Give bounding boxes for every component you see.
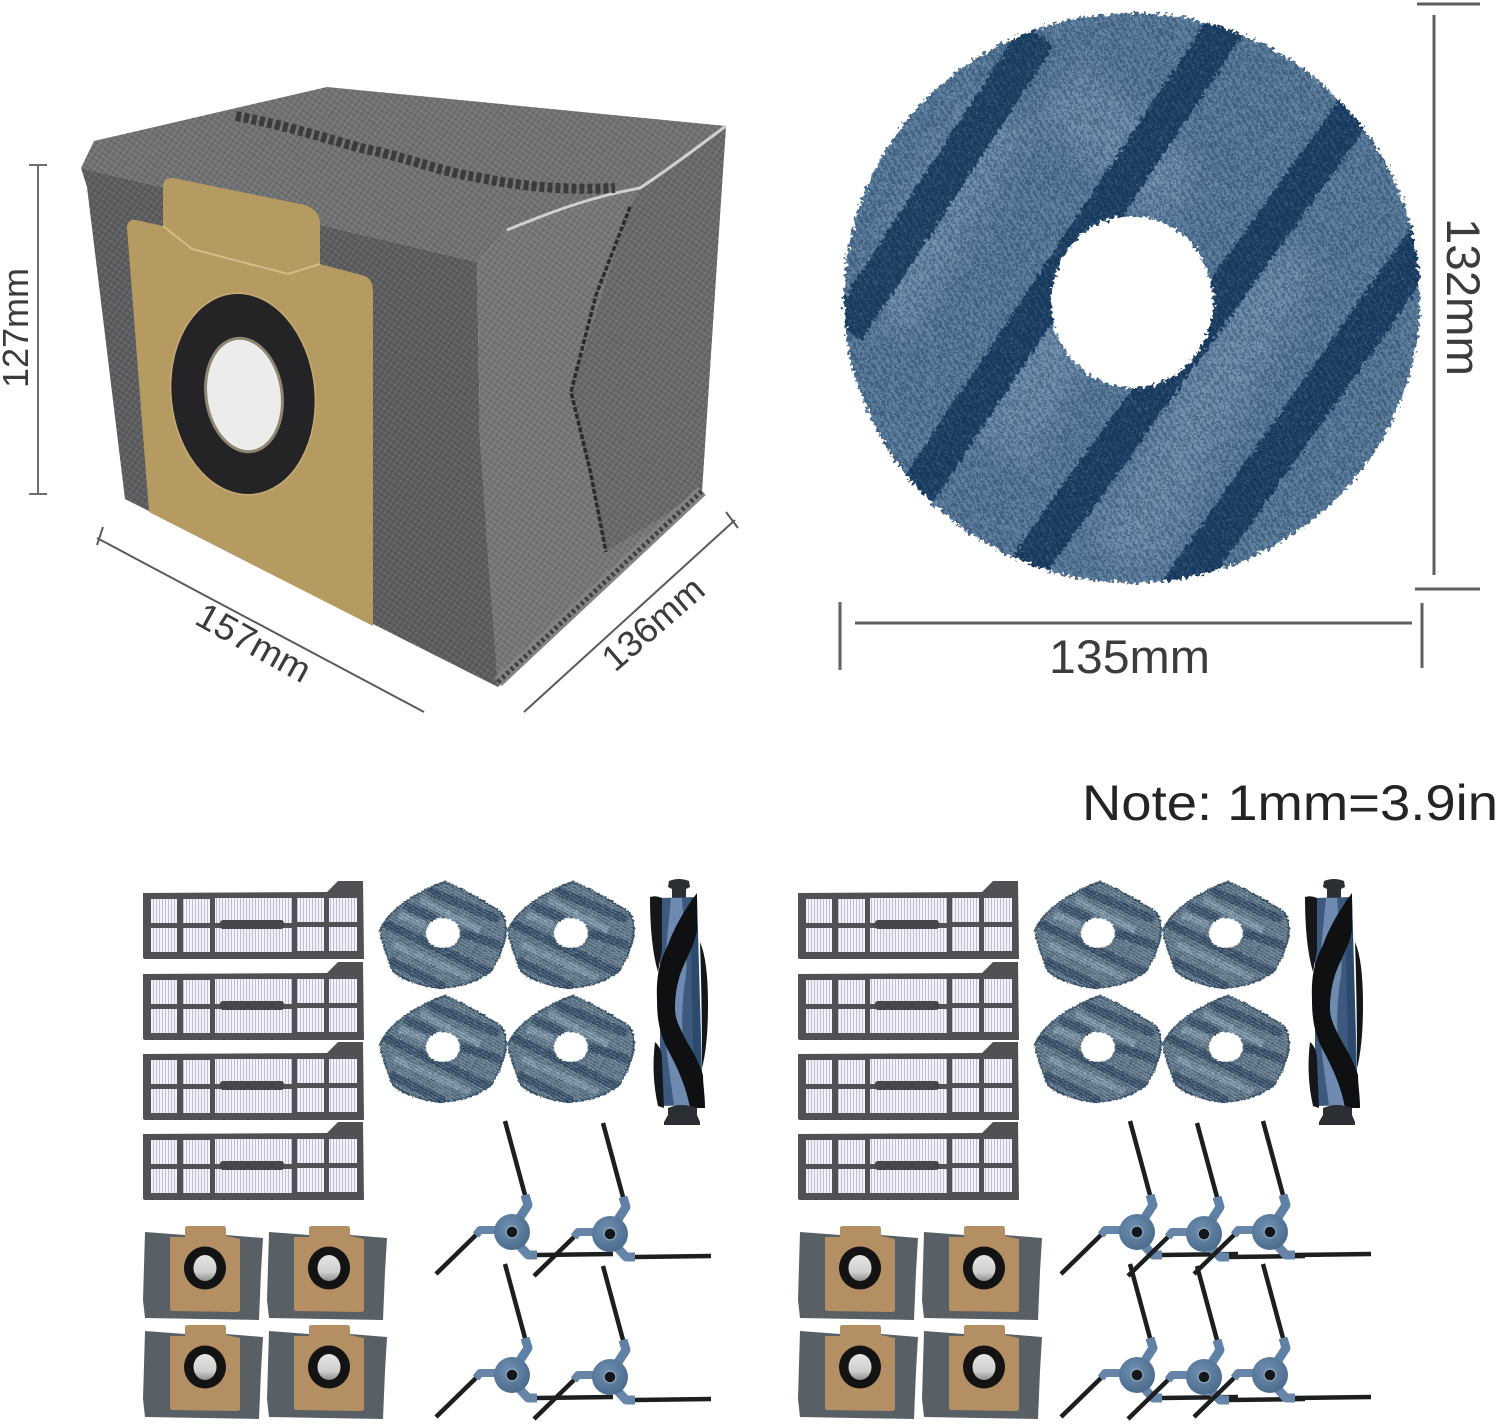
filter row 1 bbox=[798, 881, 1019, 959]
bag side fold bbox=[571, 126, 726, 552]
gasket opening bbox=[198, 333, 290, 457]
pad stripes bbox=[844, 13, 1430, 590]
bag fabric weave bbox=[81, 87, 726, 687]
dimension: 157mm bbox=[97, 527, 424, 712]
roller brush bbox=[650, 879, 708, 1125]
dimension: 132mm bbox=[1415, 4, 1490, 589]
dust bag 2 bbox=[267, 1226, 387, 1320]
side brush 1 bbox=[436, 1121, 613, 1274]
dimension: 127mm bbox=[0, 165, 47, 494]
dust bag 4 bbox=[922, 1325, 1042, 1419]
mop pad 4 bbox=[506, 994, 636, 1104]
dimension: 136mm: 136mm bbox=[593, 568, 712, 679]
side stitching bbox=[571, 207, 630, 552]
mop pad 4 bbox=[1161, 994, 1291, 1104]
dimension: 136mm bbox=[524, 512, 738, 712]
bottom hem bbox=[498, 491, 702, 682]
side brush 3 bbox=[1194, 1121, 1371, 1274]
dust bag 2 bbox=[922, 1226, 1042, 1320]
mop pad 2 bbox=[1161, 880, 1291, 990]
mop pad 3 bbox=[1033, 994, 1163, 1104]
side brush 4 bbox=[534, 1266, 711, 1419]
side brush 2 bbox=[534, 1123, 711, 1276]
bag top face bbox=[81, 87, 726, 262]
pad base bbox=[844, 13, 1420, 583]
filter row 4 bbox=[798, 1122, 1019, 1200]
dimension: 135mm: 135mm bbox=[1049, 630, 1210, 683]
bag side face bbox=[477, 126, 726, 687]
side brush 2 bbox=[1128, 1123, 1305, 1276]
cardboard collar bbox=[127, 178, 373, 626]
kit A: left accessory set bbox=[143, 879, 711, 1419]
side brush 3 bbox=[436, 1264, 613, 1417]
filter row 1 bbox=[143, 881, 364, 959]
top edge highlight bbox=[507, 126, 726, 230]
kit B: right accessory set bbox=[798, 879, 1371, 1419]
mop pad 2 bbox=[506, 880, 636, 990]
panel: dust bag with dimensions bbox=[81, 87, 726, 687]
filter row 2 bbox=[798, 962, 1019, 1040]
filter row 3 bbox=[143, 1042, 364, 1120]
side brush 6 bbox=[1194, 1264, 1371, 1417]
dimension: 135mm bbox=[840, 602, 1422, 683]
top seam bbox=[236, 116, 615, 189]
dust bag 1 bbox=[143, 1226, 263, 1320]
dust bag 4 bbox=[267, 1325, 387, 1419]
mop pad 3 bbox=[378, 994, 508, 1104]
filter row 2 bbox=[143, 962, 364, 1040]
mop pad 1 bbox=[378, 880, 508, 990]
note text: Note: 1mm=3.9in bbox=[1082, 775, 1498, 831]
filter row 3 bbox=[798, 1042, 1019, 1120]
gasket ring bbox=[161, 286, 325, 502]
side brush 1 bbox=[1061, 1121, 1238, 1274]
filter row 4 bbox=[143, 1122, 364, 1200]
side brush 5 bbox=[1128, 1266, 1305, 1419]
pad centre hole bbox=[1051, 216, 1213, 388]
collar tab outline bbox=[163, 226, 320, 274]
dust bag 1 bbox=[798, 1226, 918, 1320]
dimension: 132mm: 132mm bbox=[1437, 218, 1490, 376]
roller brush bbox=[1305, 879, 1363, 1125]
bag front face bbox=[81, 168, 498, 687]
side brush 4 bbox=[1061, 1264, 1238, 1417]
dimension: 157mm: 157mm bbox=[189, 594, 318, 691]
mop pad 1 bbox=[1033, 880, 1163, 990]
panel: round mop pad bbox=[844, 13, 1430, 590]
dust bag 3 bbox=[798, 1325, 918, 1419]
dust bag 3 bbox=[143, 1325, 263, 1419]
